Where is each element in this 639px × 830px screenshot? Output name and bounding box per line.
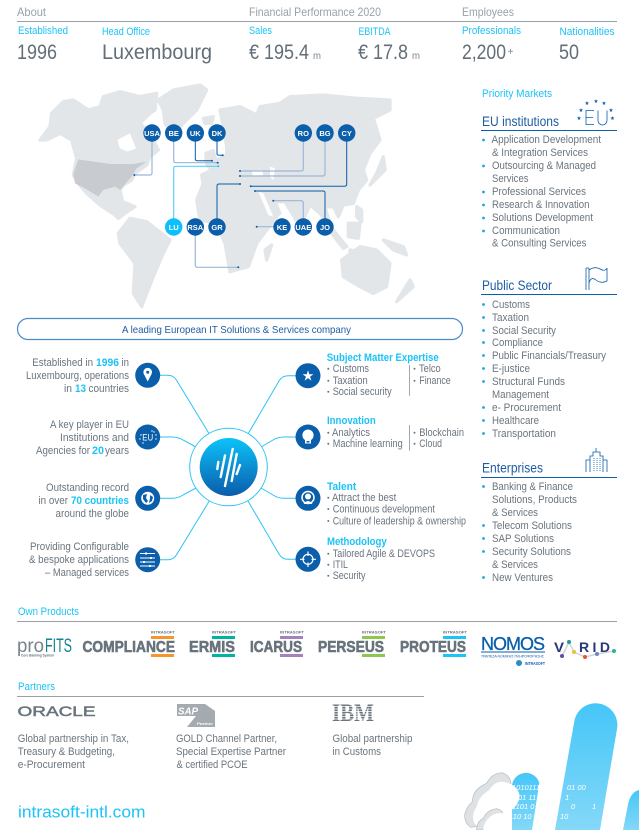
feature: methodology: ITIL — [333, 559, 348, 571]
feature: configurable applications — [29, 541, 129, 579]
section headers: about, financial performance, employees: Financial Performance 2020 — [249, 5, 381, 19]
marker: GR — [208, 218, 226, 236]
icon: star — [296, 363, 320, 388]
logo: ERMIS: INTRASOFT — [212, 630, 237, 634]
icon: EU stars: ★ — [594, 98, 599, 105]
partner: IBM: IBM — [332, 700, 374, 727]
stat: professionals — [462, 25, 521, 64]
feature: innovation: Blockchain — [419, 427, 464, 439]
feature: methodology: Methodology — [327, 536, 387, 548]
stat: professionals: 2,200 — [462, 41, 506, 64]
logo: proFITS: FITS — [45, 636, 72, 657]
marker: BE — [165, 124, 182, 142]
logo: NOMOS — [481, 634, 545, 666]
icon: target — [296, 547, 320, 572]
feature: established in 1996: in — [64, 383, 72, 395]
marker: BG — [316, 124, 334, 142]
stat: head office: Luxembourg — [102, 41, 212, 64]
feature: configurable applications: – Managed services — [45, 567, 129, 579]
marker: LU: LU — [169, 223, 179, 232]
stat: ebitda: EBITDA — [358, 26, 391, 38]
panel: enterprises: Banking & Finance — [492, 481, 573, 493]
decorative bars with cloud and binary digits: 1010111 — [512, 783, 540, 792]
stat: ebitda: € 17.8 — [358, 41, 408, 64]
logo: proFITS — [17, 636, 72, 658]
feature: innovation: Cloud — [419, 438, 442, 450]
logo: proFITS: Core Banking System — [21, 654, 54, 658]
marker: UAE: UAE — [295, 223, 311, 232]
feature: innovation: Machine learning — [333, 438, 403, 450]
icon: EU: EU — [142, 432, 153, 444]
stat: sales: Sales — [249, 25, 272, 37]
icon: globe — [135, 486, 160, 511]
feature: key player in EU: A key player in EU — [50, 419, 129, 431]
stat: professionals: Professionals — [462, 25, 521, 37]
panel: enterprises: Security Solutions — [492, 546, 571, 558]
logo: ICARUS: ICARUS — [250, 639, 302, 656]
logo: PROTEUS: INTRASOFT — [443, 630, 468, 634]
icon: flag — [586, 268, 607, 290]
panel: enterprises: & Services — [492, 559, 538, 571]
icon: sliders — [135, 547, 160, 572]
decorative bars with cloud and binary digits: 1 — [565, 793, 569, 802]
logo: PROTEUS: PROTEUS — [400, 639, 466, 656]
panel: EU institutions: Application Development — [492, 134, 601, 146]
decorative bars with cloud and binary digits: 10 — [560, 812, 569, 821]
icon: EU — [135, 424, 160, 450]
connectors to central hub — [160, 375, 296, 560]
icon: person — [296, 486, 320, 511]
logo: COMPLIANCE: INTRASOFT — [151, 630, 176, 634]
feature: talent: Attract the best — [332, 492, 396, 504]
feature: innovation — [327, 415, 464, 451]
panel: public sector: E-justice — [492, 363, 530, 375]
stat: head office: Head Office — [102, 26, 150, 38]
icon: light bulb — [296, 424, 320, 450]
panel: public sector: e- Procurement — [492, 402, 561, 414]
panel: enterprises: Telecom Solutions — [492, 520, 572, 532]
logo: VARID: R I D — [579, 639, 610, 655]
decorative bars with cloud and binary digits: 01 00 — [567, 783, 587, 792]
marker: RSA: RSA — [187, 223, 204, 232]
partner: SAP: & certified PCOE — [176, 759, 248, 771]
partner: Oracle: Global partnership in Tax, — [18, 733, 129, 745]
feature: key player in EU: Agencies for — [36, 445, 90, 457]
partner: Oracle: ORACLE — [18, 703, 96, 719]
partner: Oracle: Treasury & Budgeting, — [18, 746, 115, 758]
priority markets heading: Priority Markets — [482, 88, 552, 100]
icon: EU stars: ★ — [610, 115, 615, 122]
section headers: about, financial performance, employees: Employees — [462, 5, 514, 19]
panel: public sector: Social Security — [492, 325, 556, 337]
icon: EU stars — [577, 98, 615, 125]
panel: enterprises — [481, 460, 617, 584]
panel: EU institutions: Professional Services — [492, 186, 586, 198]
panel: public sector — [481, 278, 617, 440]
feature: established in 1996: countries — [88, 383, 129, 395]
website link: intrasoft-intl.com — [18, 802, 146, 822]
feature: innovation: Innovation — [327, 415, 376, 427]
panel: enterprises: Solutions, Products — [492, 494, 577, 506]
panel: public sector: Public Financials/Treasury — [492, 350, 606, 362]
marker: DK: DK — [212, 129, 223, 138]
logo: COMPLIANCE: COMPLIANCE — [82, 639, 175, 656]
feature: talent: Continuous development — [333, 504, 435, 516]
feature: talent: Culture of leadership & ownership — [333, 516, 466, 528]
stat: nationalities — [559, 26, 615, 64]
banner: company tagline — [18, 318, 462, 340]
feature: talent — [327, 481, 466, 528]
logo: VARID: V — [554, 639, 565, 655]
logo: PERSEUS — [318, 630, 387, 657]
marker: JO — [316, 218, 334, 236]
logo: COMPLIANCE — [82, 630, 176, 657]
marker: BE: BE — [168, 129, 179, 138]
stat: nationalities: 50 — [559, 41, 579, 64]
panel: EU institutions: Solutions Development — [492, 212, 593, 224]
partner: SAP: Partner — [197, 721, 213, 726]
partner: IBM — [331, 700, 412, 758]
feature: subject matter expertise: Taxation — [333, 375, 368, 387]
panel: public sector: Structural Funds — [492, 376, 565, 388]
marker: LU — [165, 218, 182, 236]
section headers: about, financial performance, employees — [17, 5, 617, 22]
feature: subject matter expertise: Social security — [333, 386, 392, 398]
stat: established: Established — [18, 25, 68, 37]
stat: head office — [102, 26, 212, 64]
panel: EU institutions: Services — [492, 173, 529, 185]
panel: EU institutions: Communication — [492, 225, 560, 237]
icon: EU stars: ★ — [585, 100, 590, 107]
partners heading: Partners — [18, 681, 55, 693]
connector lines — [133, 133, 347, 268]
partner: SAP: GOLD Channel Partner, — [176, 733, 277, 745]
own products heading: Own Products — [18, 606, 79, 618]
partner: IBM: Global partnership — [332, 733, 412, 745]
stat: sales: m — [313, 51, 321, 62]
panel: public sector: Healthcare — [492, 415, 539, 427]
stat: ebitda — [358, 26, 420, 64]
partner: Oracle: e-Procurement — [18, 759, 85, 771]
logo: proFITS: pro — [17, 636, 44, 657]
panel: public sector: Management — [492, 389, 549, 401]
logo: NOMOS: ΤΡΑΠΕΖΑ ΝΟΜΙΚΗΣ ΠΛΗΡΟΦΟΡΗΣΗΣ — [481, 654, 544, 658]
panel: public sector: Public Sector — [482, 278, 552, 293]
logo: PROTEUS — [400, 630, 468, 657]
logo: NOMOS: INTRASOFT — [525, 661, 545, 666]
marker: KE — [273, 218, 291, 236]
feature: configurable applications: Providing Configurable — [30, 541, 129, 553]
panel: enterprises: SAP Solutions — [492, 533, 554, 545]
stat: professionals: + — [508, 47, 514, 58]
feature: key player in EU: 20 — [92, 445, 104, 457]
feature: innovation: Analytics — [332, 427, 370, 439]
feature: subject matter expertise: Subject Matter Expertise — [327, 352, 439, 364]
marker: CY: CY — [341, 129, 352, 138]
panel: EU institutions: EU institutions — [482, 114, 559, 129]
feature: methodology: Security — [333, 570, 366, 582]
section headers: about, financial performance, employees: About — [17, 5, 47, 19]
marker: BG: BG — [319, 129, 331, 138]
feature: methodology: Tailored Agile & DEVOPS — [333, 548, 435, 560]
stat: nationalities: Nationalities — [560, 26, 615, 38]
feature: outstanding record: in over — [38, 495, 68, 507]
panel: public sector: Customs — [492, 299, 530, 311]
panel: enterprises: & Services — [492, 507, 538, 519]
stat: sales — [249, 25, 321, 64]
world map with office markers — [40, 85, 413, 307]
feature: key player in EU: years — [105, 445, 129, 457]
feature: configurable applications: & bespoke applications — [29, 554, 129, 566]
partner: SAP: SAP — [178, 706, 198, 718]
feature: established in 1996: in — [122, 357, 129, 369]
feature: established in 1996: 1996 — [96, 357, 119, 369]
panel: public sector: Compliance — [492, 337, 543, 349]
feature: established in 1996: Established in — [32, 357, 93, 369]
icon: EU stars: ★ — [577, 115, 582, 122]
banner: company tagline: A leading European IT Solutions & Services company — [122, 324, 352, 336]
feature: established in 1996: Luxembourg, operations — [26, 370, 129, 382]
stat: sales: € 195.4 — [249, 41, 309, 64]
marker: CY — [338, 124, 355, 142]
marker: RSA — [187, 218, 204, 236]
icon: building — [586, 448, 607, 472]
decorative bars with cloud and binary digits: 01 11 — [518, 793, 536, 802]
marker: UK — [187, 124, 204, 142]
marker: JO: JO — [320, 223, 330, 232]
panel: EU institutions: & Consulting Services — [492, 238, 587, 250]
marker: USA: USA — [144, 129, 160, 138]
icon: EU stars: ★ — [609, 107, 614, 114]
stat: established: 1996 — [17, 41, 57, 64]
panel: EU institutions: & Integration Services — [492, 147, 588, 159]
panel: public sector: Taxation — [492, 312, 529, 324]
marker: DK — [208, 124, 226, 142]
icon: EU stars: ★ — [579, 107, 584, 114]
feature: subject matter expertise — [327, 352, 451, 398]
marker: UAE — [295, 218, 312, 236]
icon: EU stars: ★ — [602, 100, 607, 107]
logo: ERMIS — [189, 630, 237, 657]
icon: star: ★ — [302, 368, 314, 384]
stat: established — [17, 25, 68, 64]
feature: methodology — [327, 536, 435, 582]
stat: ebitda: m — [412, 51, 420, 62]
panel: EU institutions: Research & Innovation — [492, 199, 590, 211]
feature: subject matter expertise: Telco — [419, 363, 441, 375]
partner: Oracle — [18, 703, 129, 771]
logo: ICARUS — [250, 630, 305, 657]
logo: PERSEUS: PERSEUS — [318, 639, 384, 656]
icon: location pin — [135, 363, 160, 388]
feature: subject matter expertise: Finance — [419, 375, 451, 387]
logo: ICARUS: INTRASOFT — [280, 630, 305, 634]
panel: public sector: Transportation — [492, 428, 556, 440]
feature: outstanding record — [38, 482, 129, 520]
decorative bars with cloud and binary digits: 0110 10 — [505, 812, 532, 821]
decorative bars with cloud and binary digits: 1 — [592, 802, 596, 811]
marker: GR: GR — [211, 223, 223, 232]
feature: key player in EU: Institutions and — [60, 432, 129, 444]
marker: RO — [295, 124, 312, 142]
feature: established in 1996 — [26, 357, 129, 395]
decorative bars with cloud and binary digits: 0 — [571, 802, 576, 811]
feature: outstanding record: around the globe — [56, 508, 129, 520]
logo: NOMOS: NOMOS — [481, 634, 545, 654]
partner: SAP — [176, 704, 286, 771]
feature: subject matter expertise: Customs — [333, 363, 369, 375]
marker: USA — [143, 124, 161, 142]
feature: outstanding record: 70 countries — [71, 495, 129, 507]
panel: enterprises: New Ventures — [492, 572, 553, 584]
decorative bars with cloud and binary digits: 1101 0 — [512, 802, 535, 811]
central hub logo — [190, 428, 267, 506]
marker: UK: UK — [190, 129, 201, 138]
decorative bars with cloud and binary digits — [465, 703, 639, 830]
feature: key player in EU — [36, 419, 129, 457]
logo: ERMIS: ERMIS — [189, 639, 235, 656]
partner: IBM: in Customs — [332, 746, 381, 758]
logo: PERSEUS: INTRASOFT — [362, 630, 387, 634]
logo: VARID — [554, 639, 616, 659]
feature: talent: Talent — [327, 481, 357, 493]
cloud — [465, 773, 519, 830]
feature: established in 1996: 13 — [75, 383, 86, 395]
marker: KE: KE — [277, 223, 287, 232]
panel: enterprises: Enterprises — [482, 460, 543, 476]
marker: RO: RO — [298, 129, 309, 138]
panel: EU institutions: Outsourcing & Managed — [492, 160, 596, 172]
feature: outstanding record: Outstanding record — [46, 482, 129, 494]
partner: SAP: Special Expertise Partner — [176, 746, 286, 758]
panel: EU institutions — [481, 114, 617, 250]
